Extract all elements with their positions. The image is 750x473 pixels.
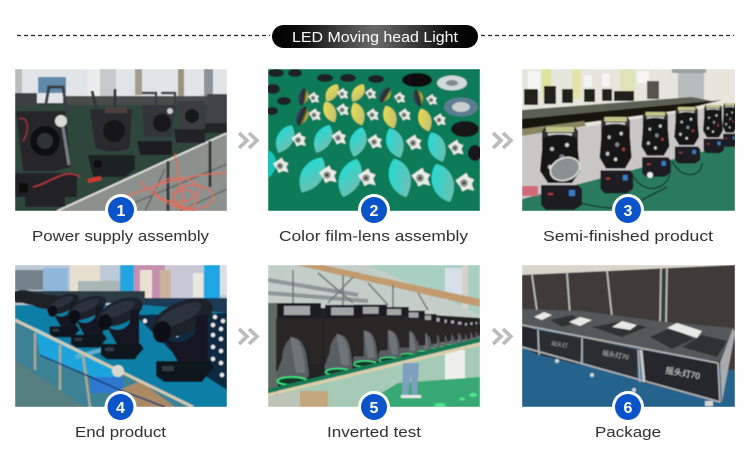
number badge 6 (612, 391, 644, 423)
number badge 2: 2 (370, 203, 379, 220)
number badge 4: 4 (116, 400, 125, 417)
number badge 1 (105, 194, 137, 226)
number badge 1: 1 (117, 203, 126, 220)
photo 6: package: 摇头灯 (551, 339, 569, 350)
number badge 6: 6 (624, 400, 633, 417)
number badge 3 (612, 194, 644, 226)
photo 3: semi-finished product (522, 69, 735, 211)
number badge 5 (358, 391, 390, 423)
photo 4: end product (15, 265, 227, 407)
arrow: step 1 to step 2 (239, 133, 257, 148)
number badge 5: 5 (370, 400, 379, 417)
photo 6: package (522, 265, 735, 407)
label: package: Package (595, 424, 661, 441)
arrow: step 4 to step 5 (239, 329, 257, 344)
photo 5: inverted test (268, 265, 480, 407)
label: semi-finished product: Semi-finished product (543, 228, 714, 245)
label: power supply assembly: Power supply assembly (32, 228, 210, 245)
photo 1: power supply assembly (15, 69, 227, 211)
photo 6: package: 摇头灯70 (602, 348, 630, 362)
number badge 4 (104, 391, 136, 423)
number badge 2 (358, 194, 390, 226)
label: end product: End product (75, 424, 167, 441)
arrow: step 2 to step 3 (493, 133, 511, 148)
number badge 3: 3 (624, 203, 633, 220)
photo 2: color film-lens assembly (268, 69, 480, 211)
header divider line, right (481, 34, 734, 36)
title pill (272, 25, 478, 48)
label: color film-lens assembly: Color film-lens assembly (279, 228, 469, 245)
arrow: step 5 to step 6 (493, 329, 511, 344)
title pill: LED Moving head Light (292, 29, 459, 46)
photo 6: package: 摇头灯70 (665, 365, 701, 381)
header divider line, left (17, 34, 270, 36)
label: inverted test: Inverted test (327, 424, 422, 441)
